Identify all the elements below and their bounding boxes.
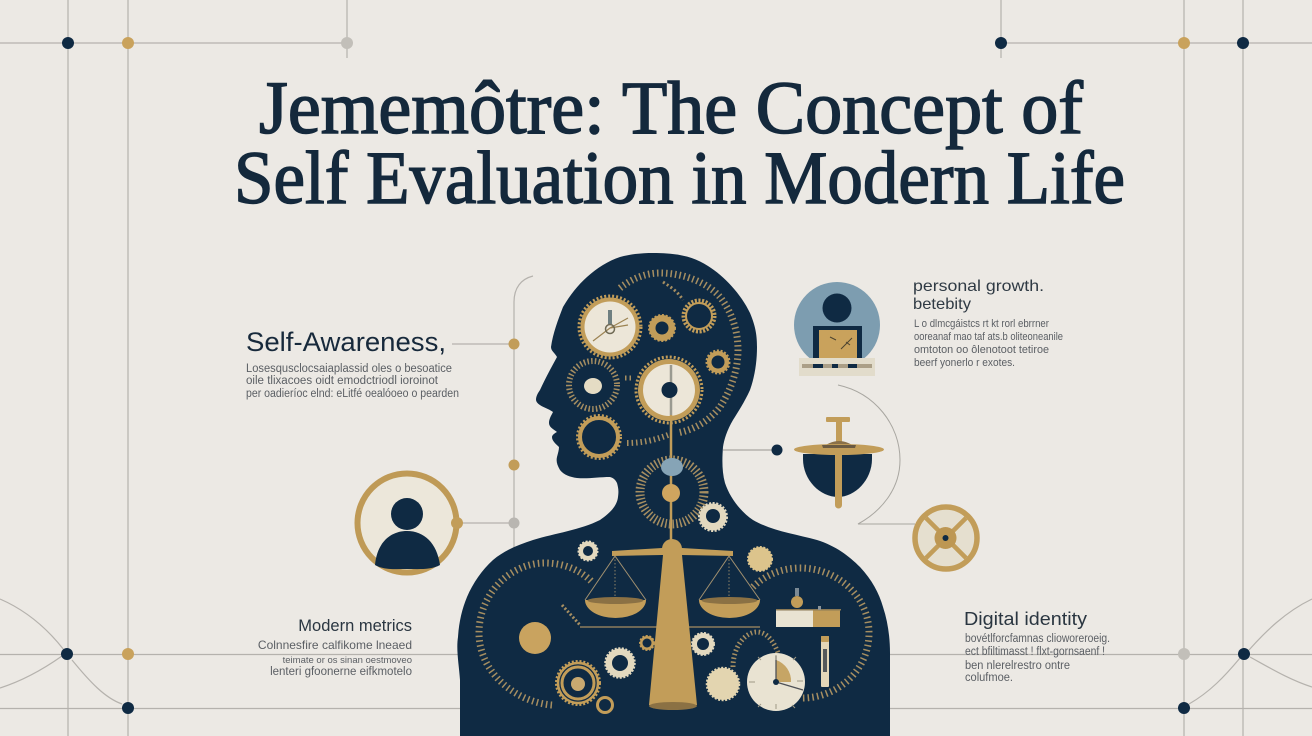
icon: person in gold ring [358, 474, 463, 572]
left connector line with nodes [452, 276, 533, 560]
heading: personal growth [913, 278, 1044, 313]
heading: personal growth: betebity [913, 296, 971, 313]
arrow: curved link to wheel [838, 385, 915, 524]
text block: digital identity body: bovétlforcfamnas clioworeroeig. [965, 633, 1110, 645]
text block: personal growth body [914, 318, 1063, 369]
heading: personal growth: personal growth. [913, 278, 1044, 295]
text block: self-awareness body [246, 363, 459, 400]
title: Jememôtre: The Concept of [259, 67, 1083, 150]
gear: ring upper right [684, 301, 714, 331]
text block: digital identity body [965, 633, 1110, 684]
text block: digital identity body: ben nlerelrestro ontre [965, 660, 1070, 672]
text block: digital identity body: ect bfiltimasst ! flxt-gornsaenf ! [965, 646, 1105, 658]
body tick arcs [479, 563, 869, 705]
text block: self-awareness body: oile tlixacoes oidt emodctriodl ioroinot [246, 375, 439, 387]
balance scale [580, 539, 760, 710]
text block: personal growth body: L o dlmcgáistcs rt kt rorl ebrrner [914, 318, 1049, 330]
text block: modern metrics body: lenteri gfoonerne eifkmotelo [270, 666, 412, 678]
gear: clock face [579, 296, 641, 358]
head tick arcs [620, 273, 738, 443]
clock in torso [747, 653, 805, 711]
heading: self-awareness: Self-Awareness, [246, 327, 446, 357]
gear: cream small neck [700, 504, 726, 530]
heading: modern metrics: Modern metrics [298, 617, 412, 635]
text block: personal growth body: beerf yonerlo r exotes. [914, 357, 1015, 369]
icon: gold wheel [915, 507, 977, 569]
gear: gold ring lower face [578, 416, 620, 458]
title: Self Evaluation in Modern Life [234, 137, 1125, 220]
book, bulb and tube [776, 588, 841, 687]
gear: large centre dial [636, 357, 702, 423]
heading: digital identity: Digital identity [964, 609, 1087, 629]
text block: self-awareness body: Losesqusclocsaiaplassid oles o besoatice [246, 363, 452, 375]
title [234, 67, 1125, 220]
connector and spinning balance icon [723, 417, 884, 509]
text block: personal growth body: omtoton oo ôlenotoot tetiroe [914, 344, 1049, 356]
gear: neck tick ring with balance stem [640, 415, 704, 545]
text block: personal growth body: ooreanaf mao taf ats.b oliteoneanile [914, 331, 1063, 343]
panel: digital identity [964, 609, 1110, 684]
silhouette: head and shoulders [457, 253, 890, 736]
small body gears [519, 542, 772, 712]
gear: tick ring with cream centre [569, 361, 617, 409]
gear: small gold upper [649, 315, 675, 341]
gear: small ring right [707, 351, 729, 373]
panel: personal growth [913, 278, 1063, 369]
icon: top-right avatar with frame [794, 282, 880, 376]
text block: self-awareness body: per oadieríoc elnd: eLitfé oealóoeo o pearden [246, 388, 459, 400]
panel: modern metrics [258, 617, 412, 678]
panel: self-awareness [246, 327, 459, 400]
text block: modern metrics body: teimate or os sinan oestmoveo [283, 655, 412, 666]
text block: modern metrics body [258, 638, 412, 678]
text block: digital identity body: colufmoe. [965, 672, 1013, 684]
text block: modern metrics body: Colnnesfire calfikome lneaed [258, 638, 412, 652]
